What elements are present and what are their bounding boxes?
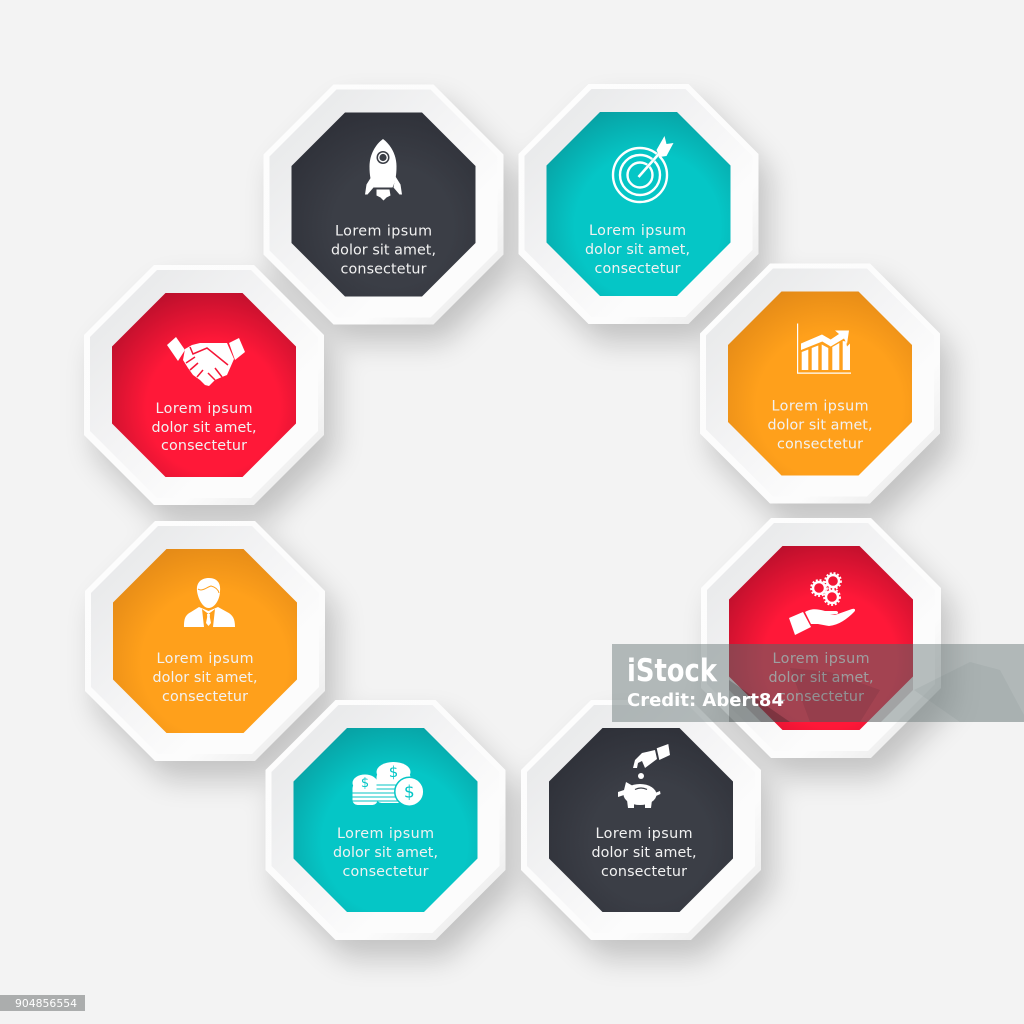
panel: teal target octagon xyxy=(518,84,758,324)
text: consectetur xyxy=(161,438,247,454)
text: consectetur xyxy=(778,689,864,705)
text: Lorem ipsum xyxy=(772,651,870,667)
text: Lorem ipsum xyxy=(335,224,432,240)
icon: handshake xyxy=(167,337,245,386)
panel: teal coins octagon xyxy=(266,700,506,940)
icon: rocket xyxy=(365,139,402,200)
image id tag xyxy=(0,995,85,1011)
icon: target with arrow xyxy=(613,136,674,202)
text: Lorem ipsum xyxy=(772,398,868,414)
panel: dark piggy bank octagon xyxy=(521,700,761,940)
drop shadows xyxy=(95,102,952,958)
watermark credit: Credit: Abert84 xyxy=(627,691,784,711)
text: dolor sit amet, xyxy=(585,242,690,258)
icon: coin stacks: $ xyxy=(389,763,398,781)
icon: hand holding gears xyxy=(789,573,855,635)
text: consectetur xyxy=(594,261,681,277)
text: Lorem ipsum xyxy=(156,401,252,417)
panel: red gears octagon xyxy=(701,518,941,758)
icon: businessman xyxy=(184,578,235,627)
text xyxy=(592,826,696,880)
watermark band xyxy=(612,644,1024,722)
icon: piggy bank with coin xyxy=(618,744,670,808)
text: consectetur xyxy=(340,262,427,278)
icon: coin stacks: $ xyxy=(404,782,415,802)
text: consectetur xyxy=(342,864,429,880)
text: Lorem ipsum xyxy=(596,826,692,842)
text: consectetur xyxy=(162,689,248,705)
panel: red handshake octagon xyxy=(84,265,324,505)
watermark brand: iStock xyxy=(627,653,718,689)
panel: dark rocket octagon xyxy=(264,84,504,324)
text xyxy=(768,651,874,705)
text: dolor sit amet, xyxy=(592,845,696,861)
text: Lorem ipsum xyxy=(337,826,434,842)
text xyxy=(331,224,436,278)
panel: orange person octagon xyxy=(85,521,325,761)
panel: orange chart octagon xyxy=(700,264,940,504)
text: consectetur xyxy=(777,436,863,452)
text: dolor sit amet, xyxy=(768,418,872,434)
image id tag: 904856554 xyxy=(15,997,77,1010)
text: dolor sit amet, xyxy=(152,420,256,436)
text xyxy=(152,401,256,454)
text: dolor sit amet, xyxy=(333,845,438,861)
text: consectetur xyxy=(601,864,687,880)
text: Lorem ipsum xyxy=(589,223,686,239)
text: dolor sit amet, xyxy=(331,242,436,258)
text: dolor sit amet, xyxy=(152,670,258,686)
text xyxy=(768,398,872,452)
text xyxy=(152,651,258,705)
icon: growth chart xyxy=(797,324,851,374)
icon: coin stacks: $ xyxy=(361,776,369,791)
text xyxy=(333,826,438,880)
text: Lorem ipsum xyxy=(156,651,254,667)
text: dolor sit amet, xyxy=(768,670,874,686)
icon: coin stacks xyxy=(352,762,424,806)
text xyxy=(585,223,690,277)
